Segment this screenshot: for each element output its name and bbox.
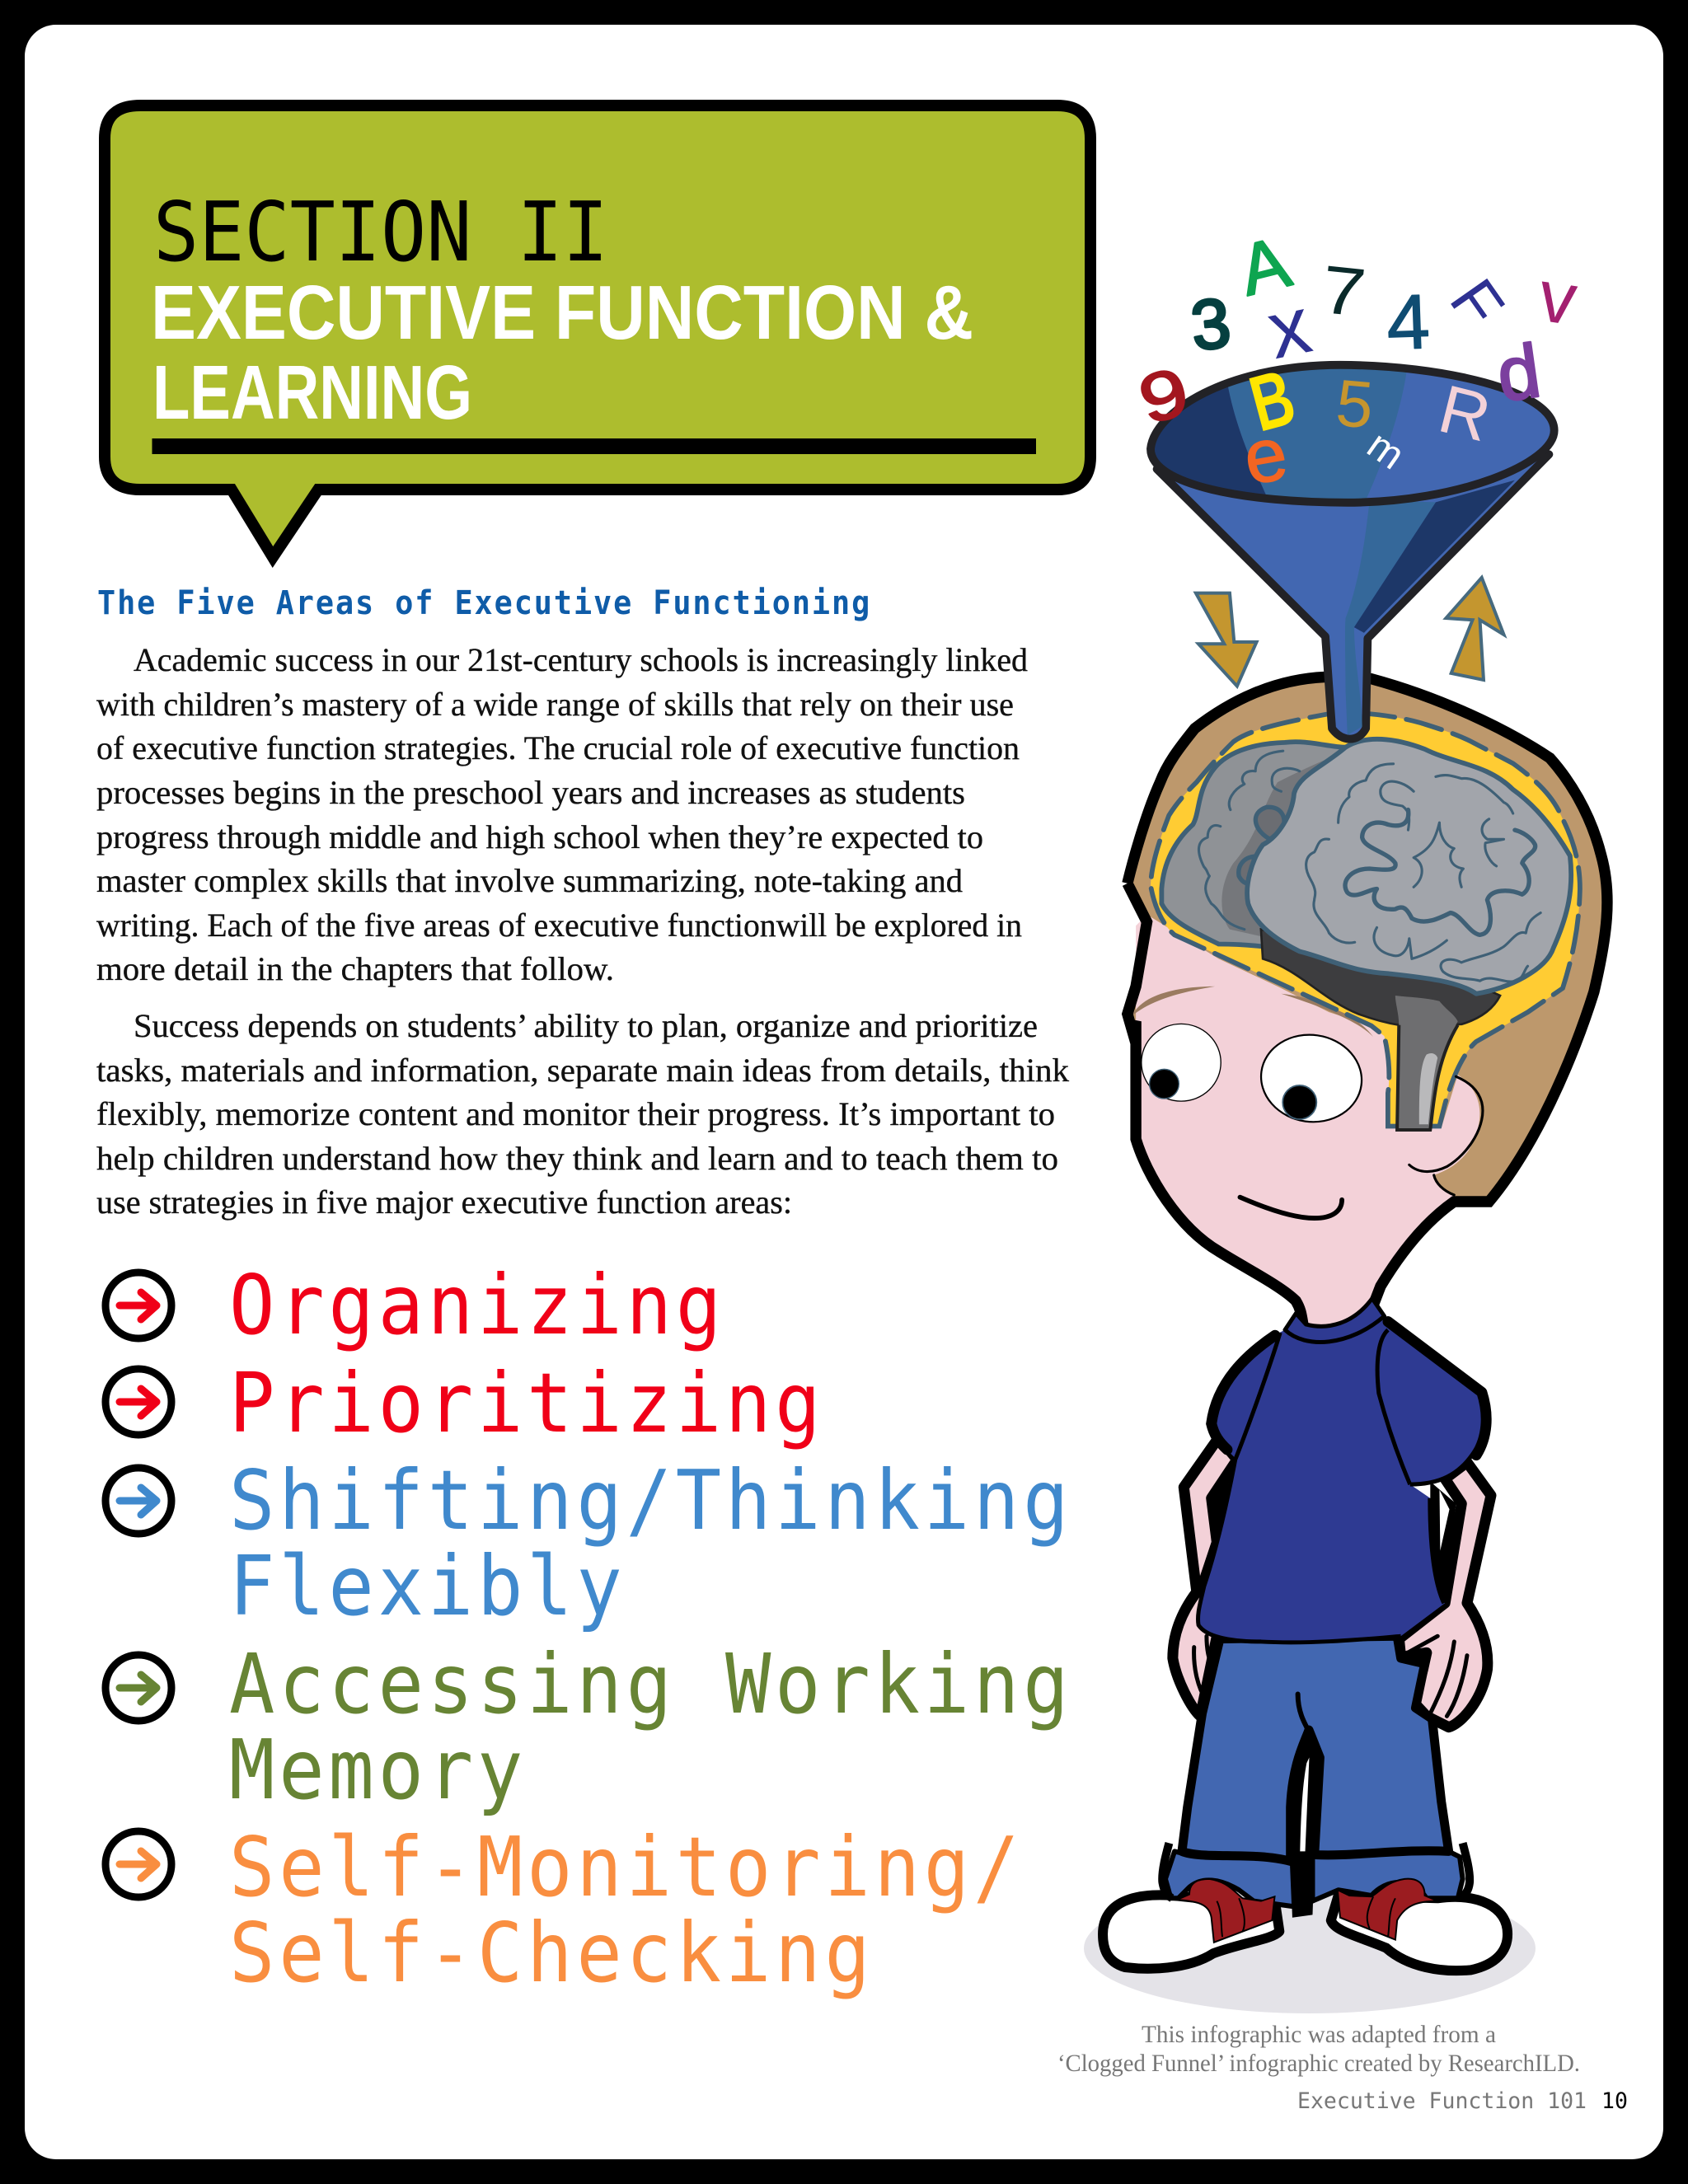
up arrow: [1446, 578, 1504, 680]
body text paragraph one: more detail in the chapters that follow.: [96, 950, 614, 987]
icon: red arrow circle: [106, 1369, 171, 1435]
falling letters and numbers: d: [1492, 329, 1545, 418]
leg gap highlight: [1300, 1758, 1309, 1851]
brain stem outline: [1397, 1025, 1458, 1130]
right arm gap: [1430, 1482, 1456, 1603]
body text paragraph one: of executive function strategies. The crucial role of executive function: [96, 729, 1020, 766]
attribution caption: This infographic was adapted from a: [1142, 2021, 1496, 2048]
title rule: [152, 438, 1036, 454]
bubble shape: [105, 105, 1090, 557]
brain back lobe: [1161, 742, 1346, 951]
left jeans cuff: [1165, 1851, 1294, 1906]
head outline: [1128, 677, 1607, 1330]
falling letters and numbers: 7: [1318, 251, 1369, 331]
title line one: EXECUTIVE FUNCTION &: [151, 269, 973, 355]
list item: working memory: [106, 1636, 1072, 1818]
title line two: LEARNING: [152, 349, 472, 435]
funnel rim: [1151, 365, 1554, 503]
falling letters and numbers: 9: [1131, 352, 1197, 438]
body text paragraph one: [96, 641, 1028, 987]
body text paragraph two: tasks, materials and information, separate main ideas from details, think: [96, 1052, 1069, 1089]
face: [1136, 915, 1479, 1339]
right eye: [1255, 1029, 1367, 1128]
body text paragraph one: progress through middle and high school when they’re expected to: [96, 818, 983, 855]
right sleeve thick outline: [1388, 1322, 1486, 1455]
body text paragraph one: processes begins in the preschool years and increases as students: [96, 774, 965, 811]
body text paragraph one: Academic success in our 21st-century schools is increasingly linked: [134, 641, 1028, 678]
mouth: [1240, 1197, 1342, 1218]
hair: [1128, 677, 1607, 1339]
falling letters and numbers: 4: [1386, 278, 1431, 366]
title speech bubble: [105, 105, 1090, 557]
falling letters and numbers: A: [1231, 222, 1297, 311]
right jeans cuff: [1312, 1851, 1463, 1901]
cone dark shade: [1354, 480, 1515, 633]
brain middle band: [1221, 752, 1343, 937]
right hand fingers: [1403, 1636, 1467, 1716]
icon: red arrow circle: [106, 1272, 171, 1338]
gap highlight: [1439, 1490, 1450, 1550]
body text paragraph two: [96, 1007, 1069, 1221]
falling letters and numbers: [1131, 222, 1582, 501]
falling letters and numbers: F: [1437, 266, 1518, 340]
left eye: [1142, 1024, 1221, 1101]
subheading: The Five Areas of Executive Functioning: [97, 584, 871, 622]
falling letters and numbers: B: [1241, 352, 1304, 448]
boy head with brain: [1128, 677, 1607, 1339]
right cuff thick outline: [1460, 1843, 1470, 1898]
brain fold bumps: [1239, 807, 1284, 884]
right shoe: [1331, 1896, 1507, 1971]
list item: shifting: Flexibly: [229, 1538, 626, 1634]
shirt thin outlines: [1198, 1330, 1476, 1643]
list item: working memory: Accessing Working: [229, 1636, 1072, 1732]
jeans crotch seam: [1298, 1694, 1312, 1738]
list item: self-monitoring: Self-Monitoring/: [229, 1819, 1023, 1915]
boy body: [1103, 1298, 1507, 1971]
brain main lobe: [1247, 739, 1571, 994]
ground shadow: [1084, 1883, 1536, 2013]
list item: self-monitoring: [106, 1819, 1023, 2001]
body text paragraph one: with children’s mastery of a wide range of skills that rely on their use: [96, 686, 1014, 723]
falling letters and numbers: R: [1432, 371, 1498, 457]
body text paragraph two: flexibly, memorize content and monitor their progress. It’s important to: [96, 1095, 1055, 1132]
right arm and hand: [1399, 1462, 1491, 1727]
eyebrows: [1132, 987, 1373, 1037]
falling letters and numbers: m: [1359, 423, 1413, 478]
body text paragraph two: Success depends on students’ ability to plan, organize and prioritize: [134, 1007, 1038, 1044]
brain stem: [1395, 996, 1458, 1130]
list item: working memory: Memory: [229, 1722, 527, 1818]
red shoe uppers: [1176, 1879, 1437, 1943]
ear: [1409, 1076, 1483, 1195]
left cuff thick outline: [1162, 1843, 1172, 1898]
cerebellum: [1261, 930, 1500, 1025]
shirt right side edge: [1430, 1498, 1444, 1603]
attribution caption: ‘Clogged Funnel’ infographic created by ResearchILD.: [1057, 2050, 1580, 2077]
left sleeve thick outline: [1212, 1335, 1275, 1450]
body text paragraph two: help children understand how they think and learn and to teach them to: [96, 1140, 1058, 1177]
jeans: [1182, 1636, 1449, 1861]
list item: prioritizing: Prioritizing: [229, 1355, 824, 1451]
cone mid shade: [1345, 500, 1436, 735]
attribution caption: [1057, 2021, 1580, 2077]
falling letters and numbers: 3: [1187, 283, 1234, 365]
falling letters and numbers: v: [1534, 254, 1582, 340]
icon: blue arrow circle: [106, 1468, 171, 1534]
list item: shifting: [106, 1452, 1072, 1634]
icon: orange arrow circle: [106, 1831, 171, 1897]
black leg gap: [1291, 1730, 1320, 1918]
falling letters and numbers: 5: [1333, 366, 1376, 443]
left arm: [1173, 1437, 1237, 1716]
funnel with letters: [1131, 222, 1582, 739]
icon: green arrow circle: [106, 1655, 171, 1721]
falling letters and numbers: e: [1237, 411, 1293, 501]
brain folds: [1198, 751, 1540, 982]
list item: self-monitoring: Self-Checking: [229, 1905, 874, 2001]
page footer: Executive Function 101: [1297, 2088, 1587, 2114]
shirt fill: [1198, 1316, 1483, 1643]
list item: shifting: Shifting/Thinking: [229, 1452, 1072, 1549]
funnel cone and stem: [1157, 434, 1549, 739]
body text paragraph one: master complex skills that involve summarizing, note-taking and: [96, 862, 963, 899]
section label: SECTION II: [153, 184, 608, 280]
funnel mouth interior: [1154, 369, 1550, 499]
left shoe: [1103, 1895, 1279, 1969]
left arm gap: [1210, 1468, 1231, 1548]
page footer: 10: [1601, 2088, 1628, 2114]
skull cavity with dashed outline: [1151, 713, 1580, 1126]
list item: organizing: Organizing: [229, 1257, 725, 1353]
left hand fingers: [1194, 1636, 1212, 1699]
falling letters and numbers: x: [1259, 279, 1318, 376]
body text paragraph one: writing. Each of the five areas of executive functionwill be explored in: [96, 907, 1022, 944]
shirt collar: [1285, 1298, 1385, 1342]
down arrow: [1196, 593, 1257, 687]
body text paragraph two: use strategies in five major executive function areas:: [96, 1183, 792, 1221]
brain stem highlight: [1419, 1053, 1437, 1124]
